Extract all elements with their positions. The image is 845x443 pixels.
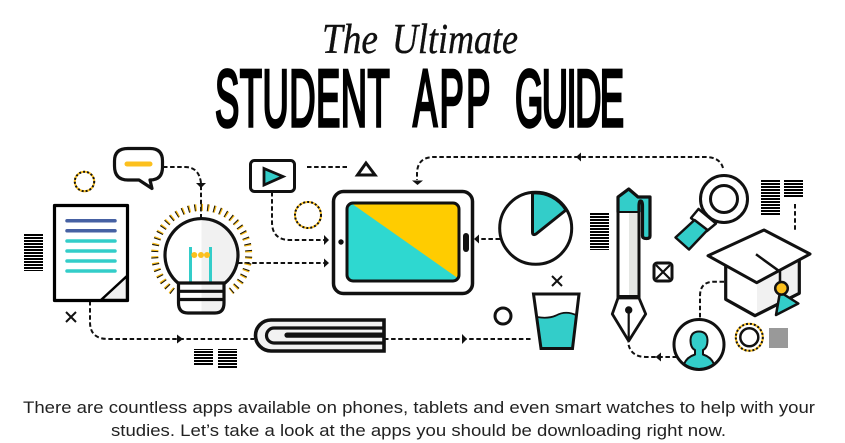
x mark: above glass: [552, 276, 562, 286]
title script line: The: [322, 17, 378, 63]
icon: pie chart: [500, 192, 572, 264]
icon: fountain pen: [612, 189, 650, 341]
x mark: below document: [66, 312, 76, 322]
icon: document: [54, 206, 128, 300]
intro paragraph: [23, 398, 815, 440]
connector: avatar to pen nib: [628, 342, 677, 362]
text stripes: right of magnifier short: [784, 180, 803, 197]
dotted circle: above document: [75, 172, 94, 191]
crossed box: [654, 263, 672, 281]
connector: pie to tablet: [474, 234, 500, 244]
title main line: GUIDE: [515, 54, 623, 144]
text stripes: below right of paperclip: [218, 349, 237, 369]
small circle: [495, 308, 511, 324]
title main line: APP: [413, 54, 493, 144]
text stripes: left of document: [24, 233, 43, 271]
dotted ring: [736, 324, 763, 351]
icon: glass of water: [534, 294, 579, 348]
icon: student avatar: [674, 320, 724, 370]
title script line: [322, 17, 518, 63]
title main line: [215, 54, 623, 144]
connector: dash by triangle: [307, 166, 349, 168]
connector: play box to tablet: [272, 192, 329, 245]
connector: speech bubble to bulb: [163, 167, 206, 218]
icon: tablet: [334, 192, 472, 294]
gray square: [769, 328, 788, 348]
connector: document to paperclip: [90, 301, 254, 344]
connector: cap to avatar: [700, 282, 724, 320]
text stripes: right of magnifier tall: [761, 180, 780, 215]
title script line: Ultimate: [392, 17, 518, 63]
connector: dash above cap: [794, 204, 796, 232]
icon: light bulb: [155, 207, 249, 313]
icon: paperclip: [255, 320, 384, 351]
connector: paperclip to glass: [384, 334, 533, 344]
intro paragraph: There are countless apps available on phones, tablets and even smart watches to help with your: [23, 398, 815, 417]
text stripes: left of pen: [590, 212, 609, 250]
icon: magnifying glass: [676, 176, 748, 250]
bulb rays: [155, 207, 249, 291]
connector: magnifier to tablet: [412, 152, 723, 185]
dotted circle: near tablet: [295, 202, 321, 228]
title: [215, 17, 623, 144]
text stripes: below left of paperclip: [194, 349, 213, 366]
icon: speech bubble: [114, 148, 162, 188]
triangle marker: [358, 163, 375, 175]
icon: play button box: [250, 160, 294, 192]
connector: bulb to tablet: [238, 258, 329, 268]
title main line: STUDENT: [215, 54, 390, 144]
icon: graduation cap: [708, 230, 810, 316]
intro paragraph: studies. Let’s take a look at the apps you should be downloading right now.: [111, 421, 726, 440]
